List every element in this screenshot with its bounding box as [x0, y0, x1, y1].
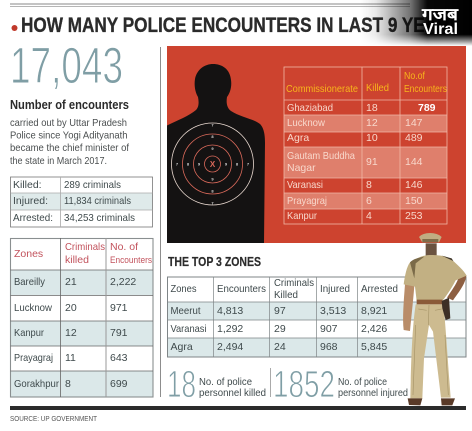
table: commissionerate: 4: [366, 210, 372, 222]
table: top 3 zones: Varanasi: [170, 323, 206, 335]
icon: shooting target silhouette: 8: [187, 162, 190, 166]
table: top 3 zones: Criminals: [274, 277, 314, 289]
icon: shooting target silhouette: X: [210, 160, 216, 169]
table: commissionerate: 789: [418, 102, 436, 114]
table: top 3 zones: Arrested: [361, 283, 398, 295]
icon: shooting target silhouette: 7: [211, 122, 214, 128]
stat: police personnel injured: 1852: [273, 364, 335, 406]
table: zones: Criminals: [65, 241, 105, 253]
table: criminals summary: 11,834 criminals: [64, 195, 131, 207]
table: top 3 zones: 968: [320, 341, 338, 353]
icon: shooting target silhouette: 7: [247, 162, 250, 166]
table: commissionerate: 91: [366, 156, 378, 168]
text block: description: became the chief minister of: [10, 142, 129, 154]
table: commissionerate: 6: [366, 195, 372, 207]
text block: description: the state in March 2017.: [10, 155, 107, 167]
table: zones: 21: [65, 276, 77, 288]
icon: shooting target silhouette: [167, 64, 265, 243]
table: zones: No. of: [110, 241, 138, 253]
table: zones: 2,222: [110, 276, 136, 288]
stat: police personnel killed: [167, 364, 266, 406]
icon: shooting target silhouette: 8: [211, 134, 214, 139]
table: zones: Prayagraj: [14, 352, 53, 364]
table: criminals summary: Arrested:: [13, 212, 53, 224]
table: commissionerate: 8: [366, 179, 372, 191]
table: top 3 zones: Killed: [274, 289, 298, 301]
stat: police personnel killed: 18: [167, 364, 196, 406]
icon: shooting target silhouette: 8: [236, 162, 239, 166]
stat: police personnel injured: [273, 364, 408, 406]
table: criminals summary: Injured:: [13, 195, 48, 207]
table: commissionerate: 253: [405, 210, 423, 222]
stat: police personnel injured: personnel injured: [338, 387, 408, 399]
table: zones: 643: [110, 352, 128, 364]
table: criminals summary: 34,253 criminals: [64, 212, 135, 224]
table: zones: 8: [65, 378, 71, 390]
icon: shooting target silhouette: 9: [211, 176, 214, 182]
text block: description: carried out by Uttar Pradesh: [10, 117, 127, 129]
table: criminals summary: 289 criminals: [64, 179, 121, 191]
panel: red commissionerate panel: [167, 46, 466, 243]
table: zones: Zones: [14, 248, 43, 260]
table: top 3 zones: Zones: [170, 283, 196, 295]
table: top 3 zones: Meerut: [170, 305, 201, 317]
table: top 3 zones: 29: [274, 323, 286, 335]
big number: encounters: 17,043: [10, 37, 123, 94]
table: top 3 zones: 907: [320, 323, 338, 335]
table: commissionerate: Ghaziabad: [287, 102, 333, 114]
table: commissionerate: Commissionerate: [286, 83, 358, 95]
table: top 3 zones: Injured: [320, 283, 350, 295]
table: top 3 zones: 1,292: [217, 323, 243, 335]
icon: shooting target silhouette: 7: [176, 162, 179, 166]
table: top 3 zones: 5,845: [361, 341, 387, 353]
table: top 3 zones: 97: [274, 305, 286, 317]
table: commissionerate: Lucknow: [287, 117, 325, 129]
table: commissionerate: 146: [405, 179, 423, 191]
table: top 3 zones: 2,426: [361, 323, 387, 335]
table: commissionerate: Encounters: [404, 83, 447, 95]
table: commissionerate: 489: [405, 132, 423, 144]
table: zones: 20: [65, 302, 77, 314]
icon: shooting target silhouette: 9: [198, 162, 201, 166]
table: top 3 zones: [168, 277, 466, 357]
stat: police personnel killed: personnel killed: [199, 387, 266, 399]
viral logo: Viral: [423, 21, 458, 38]
table: commissionerate: No.of: [404, 70, 425, 82]
table: commissionerate: 10: [366, 132, 378, 144]
heading: the top 3 zones: THE TOP 3 ZONES: [168, 254, 261, 269]
stat: police personnel killed: No. of police: [199, 376, 252, 388]
table: zones: [10, 238, 153, 397]
table: commissionerate: Kanpur: [287, 210, 317, 222]
table: commissionerate: 150: [405, 195, 423, 207]
viral logo: गजब: [421, 5, 459, 24]
table: zones: Encounters: [110, 255, 152, 265]
table: zones: 971: [110, 302, 128, 314]
table: top 3 zones: 3,513: [320, 305, 346, 317]
text block: description: Police since Yogi Adityanath: [10, 130, 128, 142]
viral logo: [360, 0, 472, 46]
table: zones: 11: [65, 352, 76, 364]
table: zones: killed: [65, 254, 89, 266]
table: commissionerate: Agra: [287, 132, 309, 144]
table: zones: Gorakhpur: [14, 378, 59, 390]
table: zones: Kanpur: [14, 327, 44, 339]
icon: shooting target silhouette: 9: [225, 162, 228, 166]
table: commissionerate: 147: [405, 117, 423, 129]
table: commissionerate: 144: [405, 156, 423, 168]
icon: shooting target silhouette: 8: [211, 188, 214, 194]
table: commissionerate: [284, 67, 447, 224]
table: commissionerate: Killed: [366, 82, 389, 94]
icon: shooting target silhouette: 7: [211, 200, 214, 206]
icon: shooting target silhouette: 9: [211, 146, 214, 151]
source note: SOURCE: UP GOVERNMENT: [10, 414, 97, 423]
table: commissionerate: Nagar: [287, 162, 316, 174]
table: zones: 791: [110, 327, 128, 339]
table: zones: Lucknow: [14, 302, 52, 314]
table: zones: Bareilly: [14, 276, 46, 288]
table: zones: 12: [65, 327, 77, 339]
stat: police personnel injured: No. of police: [338, 376, 387, 388]
table: top 3 zones: 2,494: [217, 341, 243, 353]
table: commissionerate: Prayagraj: [287, 195, 327, 207]
table: commissionerate: Gautam Buddha: [287, 150, 355, 162]
heading: number of encounters: Number of encounters: [10, 97, 129, 112]
table: top 3 zones: 24: [274, 341, 286, 353]
table: criminals summary: [10, 177, 152, 227]
table: commissionerate: 18: [366, 102, 378, 114]
icon: police officer from behind: [403, 233, 467, 405]
table: top 3 zones: 4,813: [217, 305, 243, 317]
table: commissionerate: Varanasi: [287, 179, 323, 191]
table: criminals summary: Killed:: [13, 179, 42, 191]
table: top 3 zones: Encounters: [217, 283, 266, 295]
text block: description: [10, 117, 129, 167]
table: top 3 zones: Agra: [170, 341, 193, 353]
table: commissionerate: 12: [366, 117, 378, 129]
table: zones: 699: [110, 378, 128, 390]
table: top 3 zones: 8,921: [361, 305, 387, 317]
